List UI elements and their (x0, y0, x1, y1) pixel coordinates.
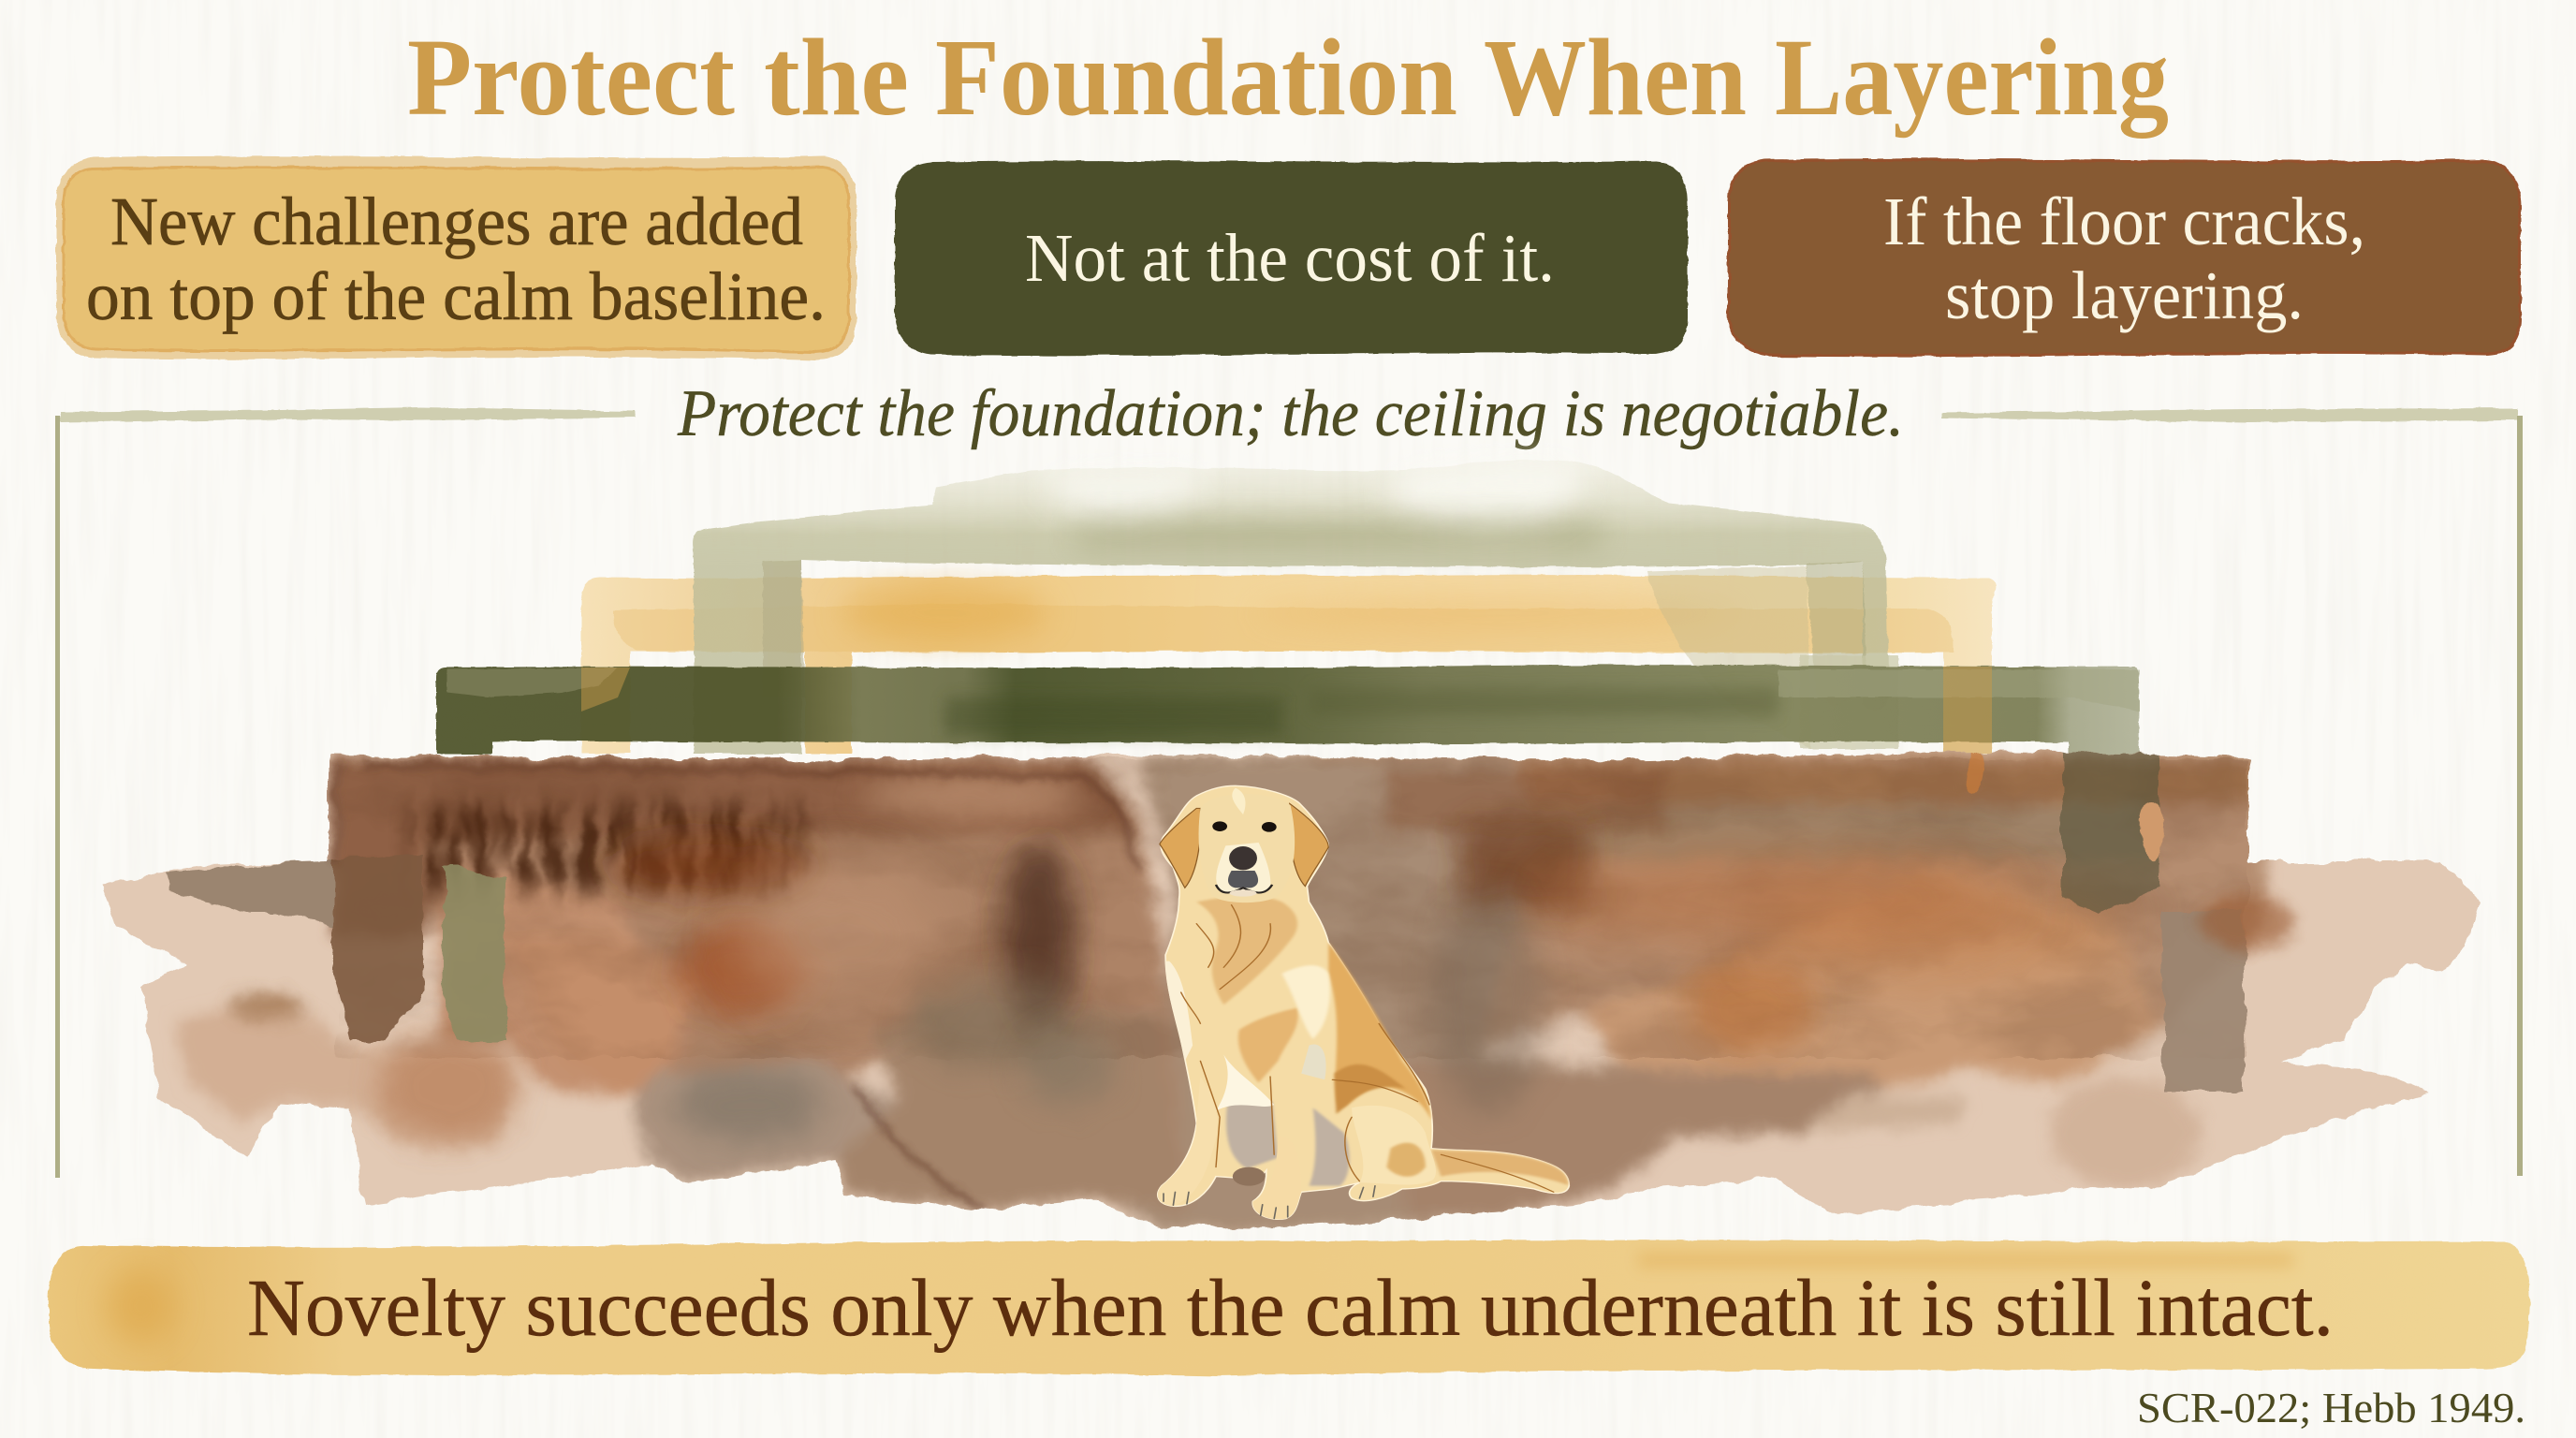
layer: sage ceiling band (693, 460, 1898, 754)
title: Layering (1775, 16, 2169, 139)
dog ears (1160, 808, 1201, 888)
front legs (1158, 1077, 1218, 1206)
muzzle (1216, 843, 1270, 895)
callout text: not at the cost: Not at the cost of it. (1025, 220, 1555, 296)
eyes (1212, 821, 1227, 831)
belly shadow (1226, 1102, 1350, 1186)
layer: yellow leg overlay (581, 667, 1992, 754)
callout text: floor cracks: stop layering. (1945, 257, 2304, 333)
soft washes (175, 749, 2265, 1236)
flank shading (1328, 943, 1431, 1121)
fur strokes (1181, 905, 1554, 1192)
dog face (1199, 794, 1295, 902)
subtitle: Protect the foundation; the ceiling is negotiable. (677, 377, 1904, 450)
mottling over the main block only (337, 758, 2247, 1058)
nose (1229, 846, 1257, 870)
blotches (1685, 960, 1816, 1053)
foundation: brown floor wash (75, 740, 2509, 1245)
panel: floor cracks callout (1729, 160, 2520, 356)
paw toes (1164, 1186, 1375, 1219)
frame: sage brush lines (55, 407, 2523, 1178)
illustration: stacked layers (75, 460, 2509, 1245)
callout text: new challenges: New challenges are added (110, 183, 803, 259)
panel: new challenges callout (56, 156, 856, 360)
banner: takeaway (48, 1240, 2530, 1376)
callout text: floor cracks: If the floor cracks, (1883, 183, 2365, 259)
panel: not at the cost callout (895, 161, 1688, 356)
callout text: new challenges (86, 183, 826, 334)
title: When (1484, 16, 1747, 139)
haunch (1352, 1106, 1436, 1184)
title: the (764, 16, 909, 139)
dog body silhouette (1158, 785, 1569, 1219)
title: Protect (407, 16, 735, 139)
chest fur patches (1196, 896, 1297, 1005)
soft edge darkening (337, 763, 1137, 1210)
layer: olive middle band (436, 665, 2139, 805)
icon: golden retriever sitting (1158, 785, 1569, 1219)
callout text: new challenges: on top of the calm baseline. (86, 258, 826, 334)
callout text: floor cracks (1883, 183, 2365, 333)
title (407, 16, 2169, 139)
title: Foundation (935, 16, 1457, 139)
banner text: Novelty succeeds only when the calm underneath it is still intact. (247, 1262, 2334, 1353)
crisp legs and strips (163, 859, 334, 927)
citation: SCR-022; Hebb 1949. (2137, 1384, 2525, 1431)
layer: yellow novelty band (581, 575, 1997, 754)
